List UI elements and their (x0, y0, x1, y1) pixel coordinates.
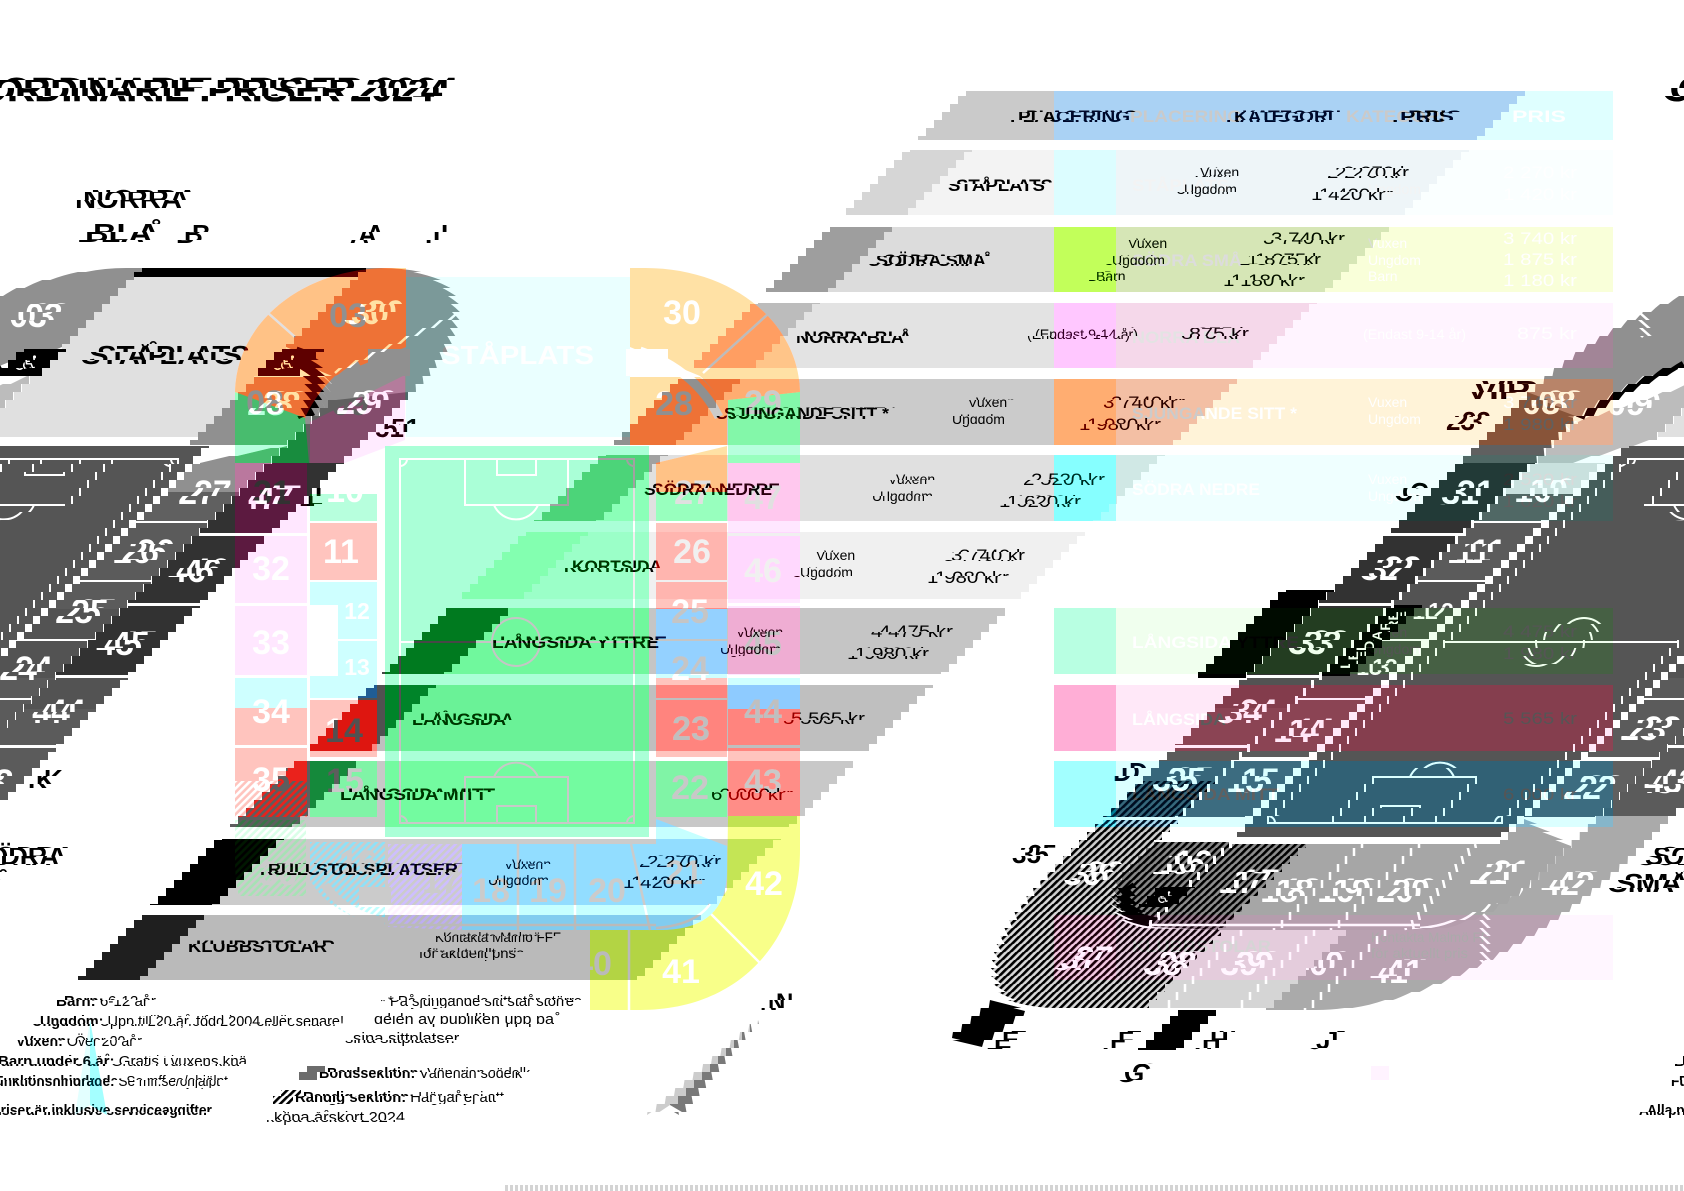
column: inner right sections 27 to 22: 22 (671, 769, 709, 807)
row: Södra små: 1 875 kr (1503, 251, 1578, 269)
corner: south-west hatched sections 36, 16, 17, 37, 38 and section 39 (235, 820, 656, 1008)
corner: south-west hatched sections 36, 16, 17, 37, 38 and section 39: 39 (504, 945, 542, 983)
row: Södra små: Vuxen (1368, 235, 1407, 251)
map labels: zones and gate letters: K (812, 764, 831, 794)
column: outer left sections 31 to 35: 34 (252, 693, 290, 731)
legend: age categories: Barn: 6-12 år (1056, 993, 1148, 1010)
map labels: zones and gate letters: 23 (186, 406, 215, 436)
map labels: zones and gate letters: SMÅ (812, 868, 878, 898)
column: outer left sections 31 to 35 (235, 463, 307, 817)
row: Långsida: 5 565 kr (1503, 710, 1578, 728)
column: inner left sections 10 to 15: 12 (344, 598, 370, 624)
map labels: zones and gate letters: F (466, 1025, 482, 1055)
row: Södra nedre: 1 620 kr (1503, 493, 1578, 511)
row: Klubbstolar: Kontakta Malmö FF (1371, 929, 1489, 945)
map labels: zones and gate letters: VIP (174, 375, 230, 405)
column: inner left sections 10 to 15: 14 (325, 712, 363, 750)
legend: age categories (1054, 993, 1360, 1119)
legend: table section and striped section keys: Randig sektion: Här går ej att (1391, 1089, 1593, 1106)
map labels: zones and gate letters: C (206, 477, 225, 507)
corner: south-west hatched sections 36, 16, 17, 37, 38 and section 39: 17 (422, 863, 460, 901)
corner: north-west sections 03, 08, 09: 08 (246, 384, 284, 422)
column: outer left sections 31 to 35: 33 (252, 624, 290, 662)
row: Långsida: LÅNGSIDA (1132, 710, 1226, 729)
map labels: zones and gate letters: NORRA (275, 184, 382, 214)
row: Ståplats: STÅPLATS (1132, 176, 1229, 195)
stand: top standing section: STÅPLATS (441, 340, 594, 370)
row: Långsida yttre: Ungdom (1368, 641, 1421, 657)
row: south sections 18 to 21: 21 (665, 854, 703, 892)
row: Kortsida: 1 980 kr (1503, 569, 1578, 587)
row: Södra nedre (1054, 455, 1613, 521)
corner: south-east sections 42, 41, 40 (574, 816, 800, 1010)
row: Södra nedre: Vuxen (1368, 471, 1407, 487)
row: Kortsida (1054, 532, 1613, 599)
row: south sections 18 to 21 (462, 819, 727, 930)
corner: south-west hatched sections 36, 16, 17, 37, 38 and section 39: 16 (339, 844, 377, 882)
map labels: zones and gate letters: SÖDRA (817, 841, 915, 871)
row: Klubbstolar: för aktuellt pris (1371, 945, 1468, 961)
column: inner left sections 10 to 15: LEDARE (317, 611, 333, 669)
column: outer right sections 47 to 43: 46 (744, 552, 782, 590)
row: Rullstolsplatser: RULLSTOLSPLATSER (1132, 860, 1322, 879)
row: Klubbstolar: KLUBBSTOLAR (1132, 937, 1271, 956)
corner: south-east sections 42, 41, 40: 42 (745, 865, 783, 903)
row: Södra nedre: 2 520 kr (1503, 471, 1578, 489)
corner: south-west hatched sections 36, 16, 17, 37, 38 and section 39: ♿ (368, 888, 382, 907)
row: Kortsida: 3 740 kr (1503, 547, 1578, 565)
row: Södra små (1054, 227, 1613, 292)
row: Ståplats (1054, 150, 1613, 215)
column: outer right sections 47 to 43: 45 (744, 625, 782, 663)
icon: compass north needle: N (84, 989, 101, 1016)
column: inner left sections 10 to 15: 15 (326, 762, 364, 800)
column: inner right sections 27 to 22 (656, 446, 727, 817)
legend: age categories: Ungdom: Upp till 20 år, född 2004 eller senare! (1056, 1013, 1360, 1030)
row: Södra nedre: SÖDRA NEDRE (1132, 480, 1260, 499)
corner: south-west hatched sections 36, 16, 17, 37, 38 and section 39: 36 (259, 855, 297, 893)
corner: south-east sections 42, 41, 40: 41 (662, 953, 700, 991)
legend: table section and striped section keys: Bordssektion: Vänerian södelk (1391, 1065, 1594, 1082)
row: Sjungande sitt: SJUNGANDE SITT * (1132, 404, 1297, 423)
row: south sections 18 to 21: 19 (529, 872, 567, 910)
column: outer right sections 47 to 43: 44 (744, 693, 782, 731)
column: inner right sections 27 to 22: 23 (672, 710, 710, 748)
column: inner left sections 10 to 15: 10 (326, 472, 364, 510)
entrance blocks around the stadium (186, 590, 540, 1050)
footnote: sjungande sitt: * På sjungande sitt står större (1380, 993, 1574, 1010)
row: Ståplats: Vuxen (1368, 164, 1407, 180)
row: Klubbstolar (1054, 915, 1613, 980)
row: Södra små: SÖDRA SMÅ (1132, 251, 1242, 270)
footnote: sjungande sitt: delen av publiken upp på (1390, 1011, 1571, 1028)
corner: south-west hatched sections 36, 16, 17, 37, 38 and section 39: 38 (427, 945, 465, 983)
panel: price table (1054, 91, 1613, 980)
legend: age categories: Funktionshindrade: Se mff.se/ohjälpt (1067, 1073, 1301, 1090)
footnote: sjungande sitt: sina sittplatser. (1385, 1030, 1495, 1047)
row: south sections 18 to 21: 18 (472, 872, 510, 910)
column: outer right sections 47 to 43: 43 (744, 763, 782, 801)
row: Sjungande sitt: 3 740 kr (1503, 394, 1578, 412)
legend: table section and striped section keys (1369, 1065, 1594, 1126)
table header: PLACERING (1130, 107, 1242, 126)
map labels: zones and gate letters: E (350, 1025, 367, 1055)
stand: top standing section (401, 268, 632, 437)
row: Kortsida: Vuxen (1368, 547, 1407, 563)
corner: north-east sections 30, 28, 29: ♿ (638, 351, 656, 375)
row: Sjungande sitt: Vuxen (1368, 394, 1407, 410)
table header (1054, 91, 1613, 140)
row: Norra blå: 875 kr (1517, 325, 1578, 343)
column: inner left sections 10 to 15: 11 (323, 533, 359, 571)
row: Södra små: Ungdom (1368, 252, 1421, 268)
panel: stadium seating map (174, 184, 915, 1088)
row: Långsida mitt: LÅNGSIDA MITT (1132, 785, 1280, 804)
row: south sections 18 to 21: 20 (588, 872, 626, 910)
map labels: zones and gate letters: A (590, 219, 609, 249)
row: Långsida (1054, 685, 1613, 751)
column: outer left sections 31 to 35: 35 (252, 761, 290, 799)
row: Kortsida: Ungdom (1368, 564, 1421, 580)
row: Långsida yttre: Vuxen (1368, 624, 1407, 640)
map labels: zones and gate letters: I (665, 219, 672, 249)
map labels: zones and gate letters: H (558, 1025, 577, 1055)
table header: PRIS (1512, 107, 1566, 126)
map labels: zones and gate letters: L (803, 482, 819, 512)
column: outer left sections 31 to 35: 31 (253, 474, 291, 512)
row: Långsida yttre: LÅNGSIDA YTTRE (1132, 633, 1299, 652)
row: Långsida yttre (1054, 608, 1613, 674)
corner: north-east sections 30, 28, 29: 28 (655, 385, 693, 423)
row: Långsida mitt: 6 000 kr (1503, 786, 1578, 804)
map labels: zones and gate letters: B (416, 219, 435, 249)
row: Långsida yttre: 4 475 kr (1503, 623, 1578, 641)
row: Ståplats: Ungdom (1368, 181, 1421, 197)
row: Södra nedre: Ungdom (1368, 488, 1421, 504)
column: inner right sections 27 to 22: 25 (671, 593, 709, 631)
row: Ståplats: 2 270 kr (1503, 164, 1578, 182)
map labels: zones and gate letters: D (205, 757, 224, 787)
row: Sjungande sitt: Ungdom (1368, 411, 1421, 427)
map labels: zones and gate letters (174, 184, 915, 1088)
column: inner left sections 10 to 15 (310, 463, 377, 817)
column: inner right sections 27 to 22: 27 (674, 474, 712, 512)
title: ORDINARIE PRISER 2024 (74, 71, 531, 108)
corner: north-west sections 03, 08, 09: 09 (331, 385, 369, 423)
row: Långsida yttre: 1 980 kr (1503, 645, 1578, 663)
corner: north-east sections 30, 28, 29: 30 (663, 294, 701, 332)
corner: north-west sections 03, 08, 09 (235, 268, 410, 463)
football pitch (385, 446, 649, 837)
footnote: sjungande sitt (1380, 993, 1574, 1047)
row: Rullstolsplatser (1054, 839, 1613, 905)
legend: age categories: Barn under 6 år: Gratis i vuxens knä (1054, 1053, 1304, 1070)
row: Sjungande sitt: 1 980 kr (1503, 416, 1578, 434)
row: Sjungande sitt (1054, 379, 1613, 445)
icon: compass north needle (75, 989, 107, 1115)
map labels: zones and gate letters: BLÅ (317, 218, 384, 248)
row: Långsida mitt (1054, 761, 1613, 827)
row: Rullstolsplatser: 2 270 kr (1503, 853, 1578, 871)
row: Södra små: 3 740 kr (1503, 230, 1578, 248)
row: Rullstolsplatser: 1 420 kr (1503, 874, 1578, 892)
corner: north-west sections 03, 08, 09: ♿ (380, 351, 398, 375)
map labels: zones and gate letters: 35 (184, 839, 213, 869)
column: inner left sections 10 to 15: 13 (344, 654, 370, 680)
legend: table section and striped section keys: köpa årskort 2024 (1386, 1109, 1517, 1126)
corner: south-west hatched sections 36, 16, 17, 37, 38 and section 39: 37 (336, 940, 374, 978)
row: Norra blå (1054, 303, 1613, 368)
map labels: zones and gate letters: 51 (807, 413, 836, 443)
row: Norra blå: NORRA BLÅ (1132, 328, 1240, 347)
row: Rullstolsplatser: Vuxen (1368, 856, 1407, 872)
column: outer right sections 47 to 43 (728, 463, 800, 816)
row: Södra små: 1 180 kr (1503, 272, 1578, 290)
row: Ståplats: 1 420 kr (1503, 186, 1578, 204)
column: inner right sections 27 to 22: 24 (671, 650, 709, 688)
legend: age categories: Alla priser är inklusive serviceavgifter. (1067, 1102, 1319, 1119)
corner: south-east sections 42, 41, 40: 40 (574, 945, 612, 983)
corner: north-east sections 30, 28, 29 (626, 268, 800, 463)
column: inner right sections 27 to 22: 26 (673, 533, 711, 571)
column: outer left sections 31 to 35: 32 (252, 550, 290, 588)
column: outer right sections 47 to 43: 47 (744, 479, 782, 517)
corner: north-east sections 30, 28, 29: 29 (744, 384, 782, 422)
row: Södra små: Barn (1368, 268, 1398, 284)
row: Norra blå: (Endast 9-14 år) (1363, 326, 1466, 342)
row: Kortsida: KORTSIDA (1132, 557, 1222, 576)
row: Rullstolsplatser: Ungdom (1368, 872, 1421, 888)
table header: KATEGORI (1346, 107, 1445, 126)
map labels: zones and gate letters: J (672, 1025, 686, 1055)
map labels: zones and gate letters: G (512, 1058, 532, 1088)
legend: age categories: Vuxen: Över 20 år (1056, 1032, 1174, 1050)
corner: north-west sections 03, 08, 09: 03 (329, 297, 367, 335)
